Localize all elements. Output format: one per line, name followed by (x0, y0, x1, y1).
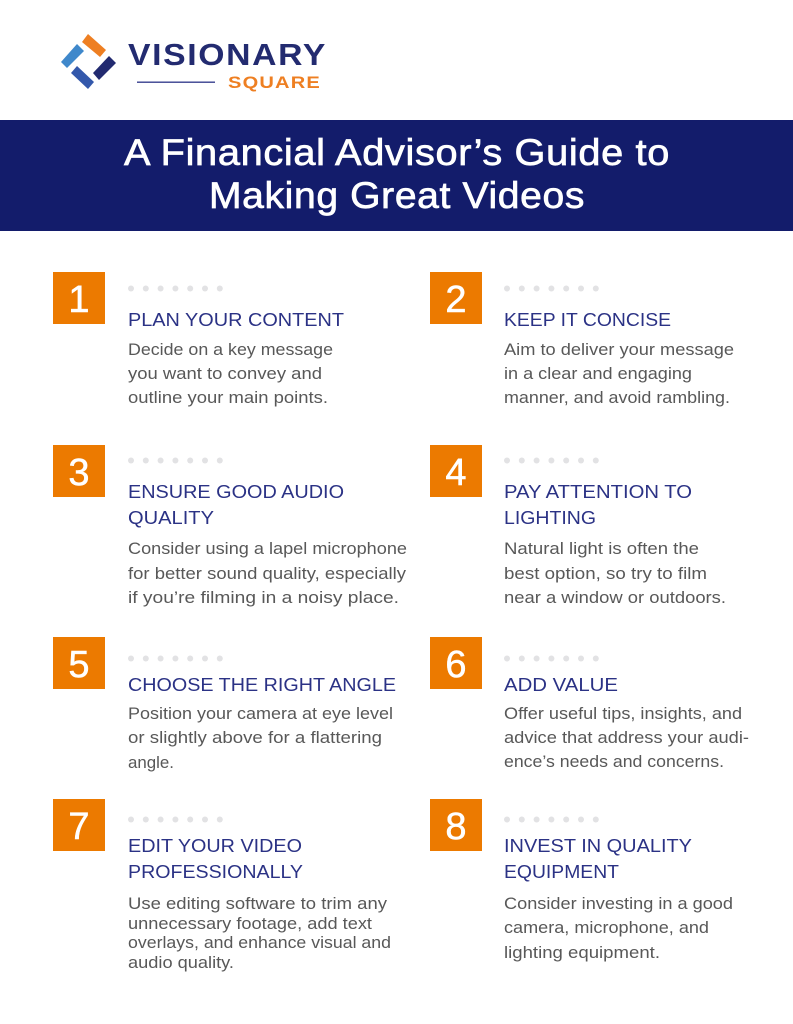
step 6: 6 (445, 644, 467, 686)
step 8: EQUIPMENT (504, 861, 619, 882)
step 4: near a window or outdoors. (504, 589, 726, 607)
step 1: outline your main points. (128, 389, 328, 407)
step 7: PROFESSIONALLY (128, 861, 303, 882)
step 1: you want to convey and (128, 365, 322, 383)
step 2: KEEP IT CONCISE (504, 309, 671, 330)
logo subtitle: SQUARE (228, 73, 321, 92)
step 2: in a clear and engaging (504, 365, 692, 383)
step 5: CHOOSE THE RIGHT ANGLE (128, 674, 396, 695)
step 5 (53, 637, 396, 772)
step 7: overlays, and enhance visual and (128, 934, 391, 952)
step 4: best option, so try to film (504, 565, 707, 583)
icon: logo diamond (61, 34, 116, 89)
step 1: Decide on a key message (128, 341, 333, 359)
step 1: 1 (68, 279, 90, 321)
step 2: 2 (445, 279, 467, 321)
step 7: audio quality. (128, 954, 234, 972)
step 3 (53, 445, 407, 607)
step 8 (430, 799, 733, 962)
step 8: 8 (445, 806, 467, 848)
step 3: ENSURE GOOD AUDIO (128, 481, 344, 502)
step 3: QUALITY (128, 507, 214, 528)
title banner (0, 120, 793, 231)
step 3: 3 (68, 452, 90, 494)
step 7: unnecessary footage, add text (128, 915, 372, 933)
step 2 (430, 272, 734, 407)
step 7: Use editing software to trim any (128, 895, 388, 913)
logo (61, 34, 327, 92)
step 3: if you’re filming in a noisy place. (128, 589, 399, 607)
title: Making Great Videos (209, 175, 585, 216)
step 4: LIGHTING (504, 507, 596, 528)
title: A Financial Advisor’s Guide to (124, 132, 670, 173)
step 8: lighting equipment. (504, 944, 660, 962)
step 2: manner, and avoid rambling. (504, 389, 730, 407)
step 8: INVEST IN QUALITY (504, 835, 692, 856)
step 6: ence’s needs and concerns. (504, 753, 724, 771)
step 2: Aim to deliver your message (504, 341, 734, 359)
step 4: PAY ATTENTION TO (504, 481, 692, 502)
step 6: Offer useful tips, insights, and (504, 705, 742, 723)
step 7: 7 (68, 806, 90, 848)
step 5: 5 (68, 644, 90, 686)
step 4: Natural light is often the (504, 540, 699, 558)
step 6: advice that address your audi- (504, 729, 749, 747)
step 1 (53, 272, 344, 407)
logo wordmark: VISIONARY (128, 37, 327, 72)
step 8: camera, microphone, and (504, 919, 709, 937)
step 5: or slightly above for a flattering (128, 729, 382, 747)
step 7 (53, 799, 391, 972)
step 3: Consider using a lapel microphone (128, 540, 407, 558)
step 5: Position your camera at eye level (128, 705, 393, 723)
step 7: EDIT YOUR VIDEO (128, 835, 302, 856)
step 5: angle. (128, 754, 174, 772)
step 8: Consider investing in a good (504, 895, 733, 913)
step 6: ADD VALUE (504, 674, 618, 695)
step 1: PLAN YOUR CONTENT (128, 309, 344, 330)
step 3: for better sound quality, especially (128, 565, 407, 583)
title (124, 132, 670, 216)
step 6 (430, 637, 749, 771)
step 4 (430, 445, 726, 607)
step 4: 4 (445, 452, 467, 494)
